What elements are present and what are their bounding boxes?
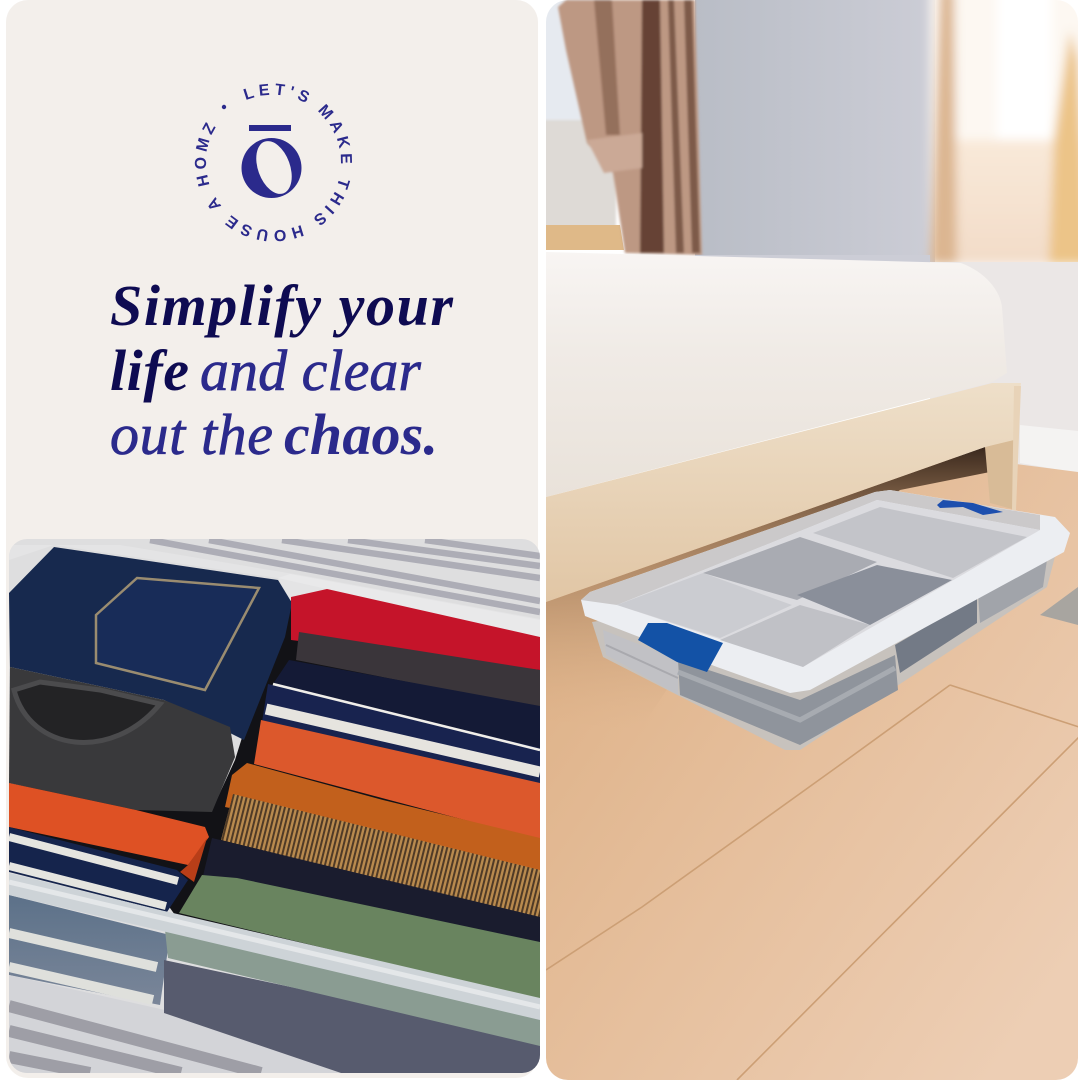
storage box front: [9, 873, 540, 1073]
storage box: [581, 490, 1070, 750]
panel: folded clothes photo: [9, 539, 540, 1073]
lid back rim: [581, 490, 1040, 605]
plank seams: [546, 685, 1079, 1080]
window sill: [546, 225, 624, 250]
red shirt: [291, 589, 540, 670]
shadow under bed: [546, 447, 988, 666]
headline: [110, 273, 453, 467]
headline: chaos.: [284, 402, 438, 467]
navy shirt: [271, 660, 540, 750]
green shirt: [179, 875, 540, 1000]
bed leg: [985, 440, 1014, 509]
panel: headline card: [6, 0, 538, 1078]
logo badge: [194, 84, 352, 242]
charcoal shirt: [296, 632, 540, 708]
baseboard: [1020, 425, 1078, 473]
burnt orange shirt: [225, 763, 540, 872]
orange shirt: [254, 720, 540, 840]
striped sheet top: [150, 540, 540, 612]
headline: life: [110, 338, 189, 403]
headline: and clear: [200, 338, 421, 403]
wall: [695, 0, 935, 270]
sheer curtain right: [930, 0, 1080, 264]
lid: [581, 490, 1070, 693]
jeans: [9, 547, 292, 740]
navy striped left: [9, 827, 188, 912]
rug corner: [1040, 587, 1078, 625]
striped brown shirt: [221, 794, 540, 919]
folded towels left: [606, 644, 678, 679]
curtain: [558, 0, 702, 255]
mattress: [546, 252, 1007, 497]
logo ring text: LET'S MAKE THIS HOUSE A HOMZ: [194, 84, 352, 242]
wall edge over sheer: [695, 255, 930, 262]
orange folded left: [9, 783, 209, 882]
lid window: [617, 500, 1040, 667]
dark backing between stacks: [9, 600, 540, 956]
folded towels front: [678, 655, 898, 745]
blue handle back: [937, 500, 1003, 515]
navy shirt lower: [202, 838, 540, 944]
headline: Simplify your: [110, 273, 453, 338]
left window: [540, 0, 616, 228]
folded towels middle: [895, 597, 977, 673]
blue handle front: [638, 623, 723, 672]
side wall: [930, 262, 1078, 472]
curtain tieback: [587, 133, 642, 173]
bed frame: [546, 383, 1021, 602]
grey t-shirt: [9, 667, 235, 812]
folded towels right: [978, 562, 1047, 623]
box body: [592, 545, 1058, 750]
headline: out the: [110, 402, 273, 467]
floor: [546, 457, 1078, 1080]
panel: bedroom photo: [540, 0, 1080, 1080]
striped navy shirt: [262, 684, 540, 785]
clothes under lid: [617, 507, 1027, 667]
